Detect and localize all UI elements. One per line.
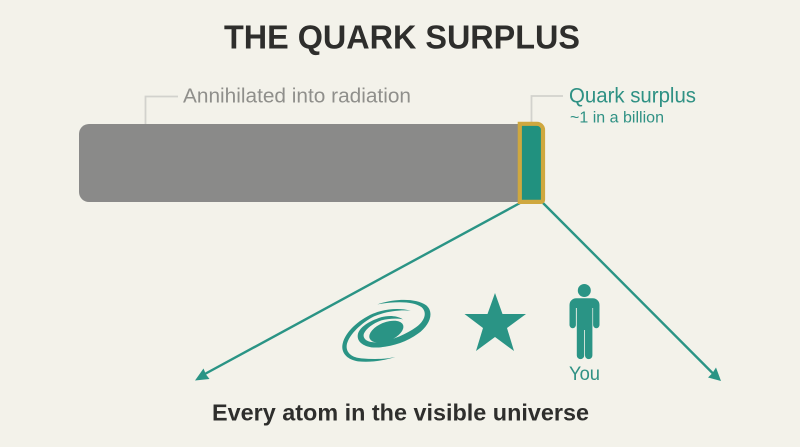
label: you: You (569, 364, 600, 385)
icon: person (570, 284, 600, 359)
arrow: left expansion (195, 203, 520, 380)
icon: spiral galaxy (342, 300, 430, 362)
icon: star (464, 293, 526, 351)
bar: annihilated portion (79, 124, 520, 202)
title: THE QUARK SURPLUS (224, 18, 580, 55)
leader line: annihilated label (146, 96, 178, 124)
label: quark surplus: ~1 in a billion (570, 110, 664, 126)
bar: quark surplus segment with gold frame (520, 124, 543, 202)
caption: Every atom in the visible universe (212, 400, 589, 426)
label: quark surplus: Quark surplus (569, 84, 696, 108)
label: quark surplus (569, 84, 696, 126)
label: annihilated into radiation: Annihilated into radiation (183, 84, 411, 108)
arrow: right expansion (543, 203, 721, 381)
leader line: quark surplus label (532, 96, 563, 124)
